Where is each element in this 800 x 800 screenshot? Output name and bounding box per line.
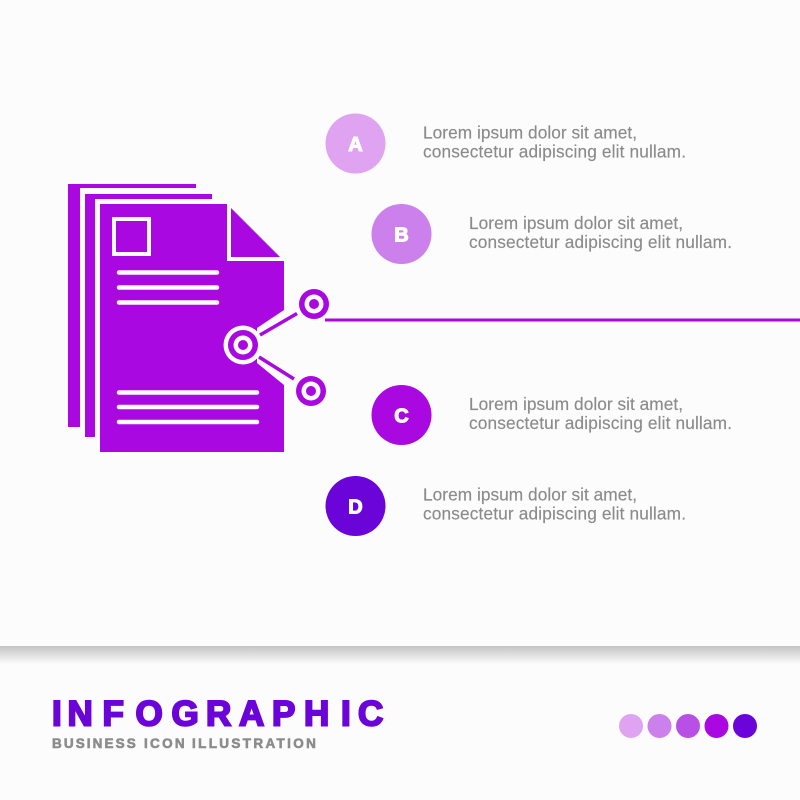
palette dots [619,714,757,738]
center node [224,326,262,364]
upper text lines [119,272,217,302]
item C: C [394,406,409,428]
bottom node [296,376,326,406]
front sheet [100,204,284,452]
item A: Lorem ipsum dolor sit amet, [423,122,637,142]
item D: Lorem ipsum dolor sit amet, [423,484,637,504]
item B: B [394,224,409,246]
subtitle: ICON [144,736,193,751]
item B [372,204,732,264]
connector line [325,318,800,322]
item C: Lorem ipsum dolor sit amet, [469,394,683,414]
subtitle: ILLUSTRATION [192,736,318,751]
item D [326,476,686,536]
lower text lines [119,392,257,422]
share links [259,314,297,379]
item B: consectetur adipiscing elit nullam. [469,232,732,252]
item C [372,385,732,445]
item A [326,114,686,174]
top node [299,289,329,319]
subtitle: BUSINESS [52,736,144,751]
item A: consectetur adipiscing elit nullam. [423,142,686,162]
item D: D [348,496,363,518]
image placeholder square [114,219,149,254]
icon: documents with share nodes [68,184,329,452]
item A: A [348,134,363,156]
back sheet [68,184,196,427]
item B: Lorem ipsum dolor sit amet, [469,213,683,233]
item C: consectetur adipiscing elit nullam. [469,413,732,433]
title: INFOGRAPHIC [52,694,383,734]
folded corner [231,208,280,257]
item D: consectetur adipiscing elit nullam. [423,504,686,524]
footer divider shadow [0,646,800,664]
middle sheet [85,194,212,437]
